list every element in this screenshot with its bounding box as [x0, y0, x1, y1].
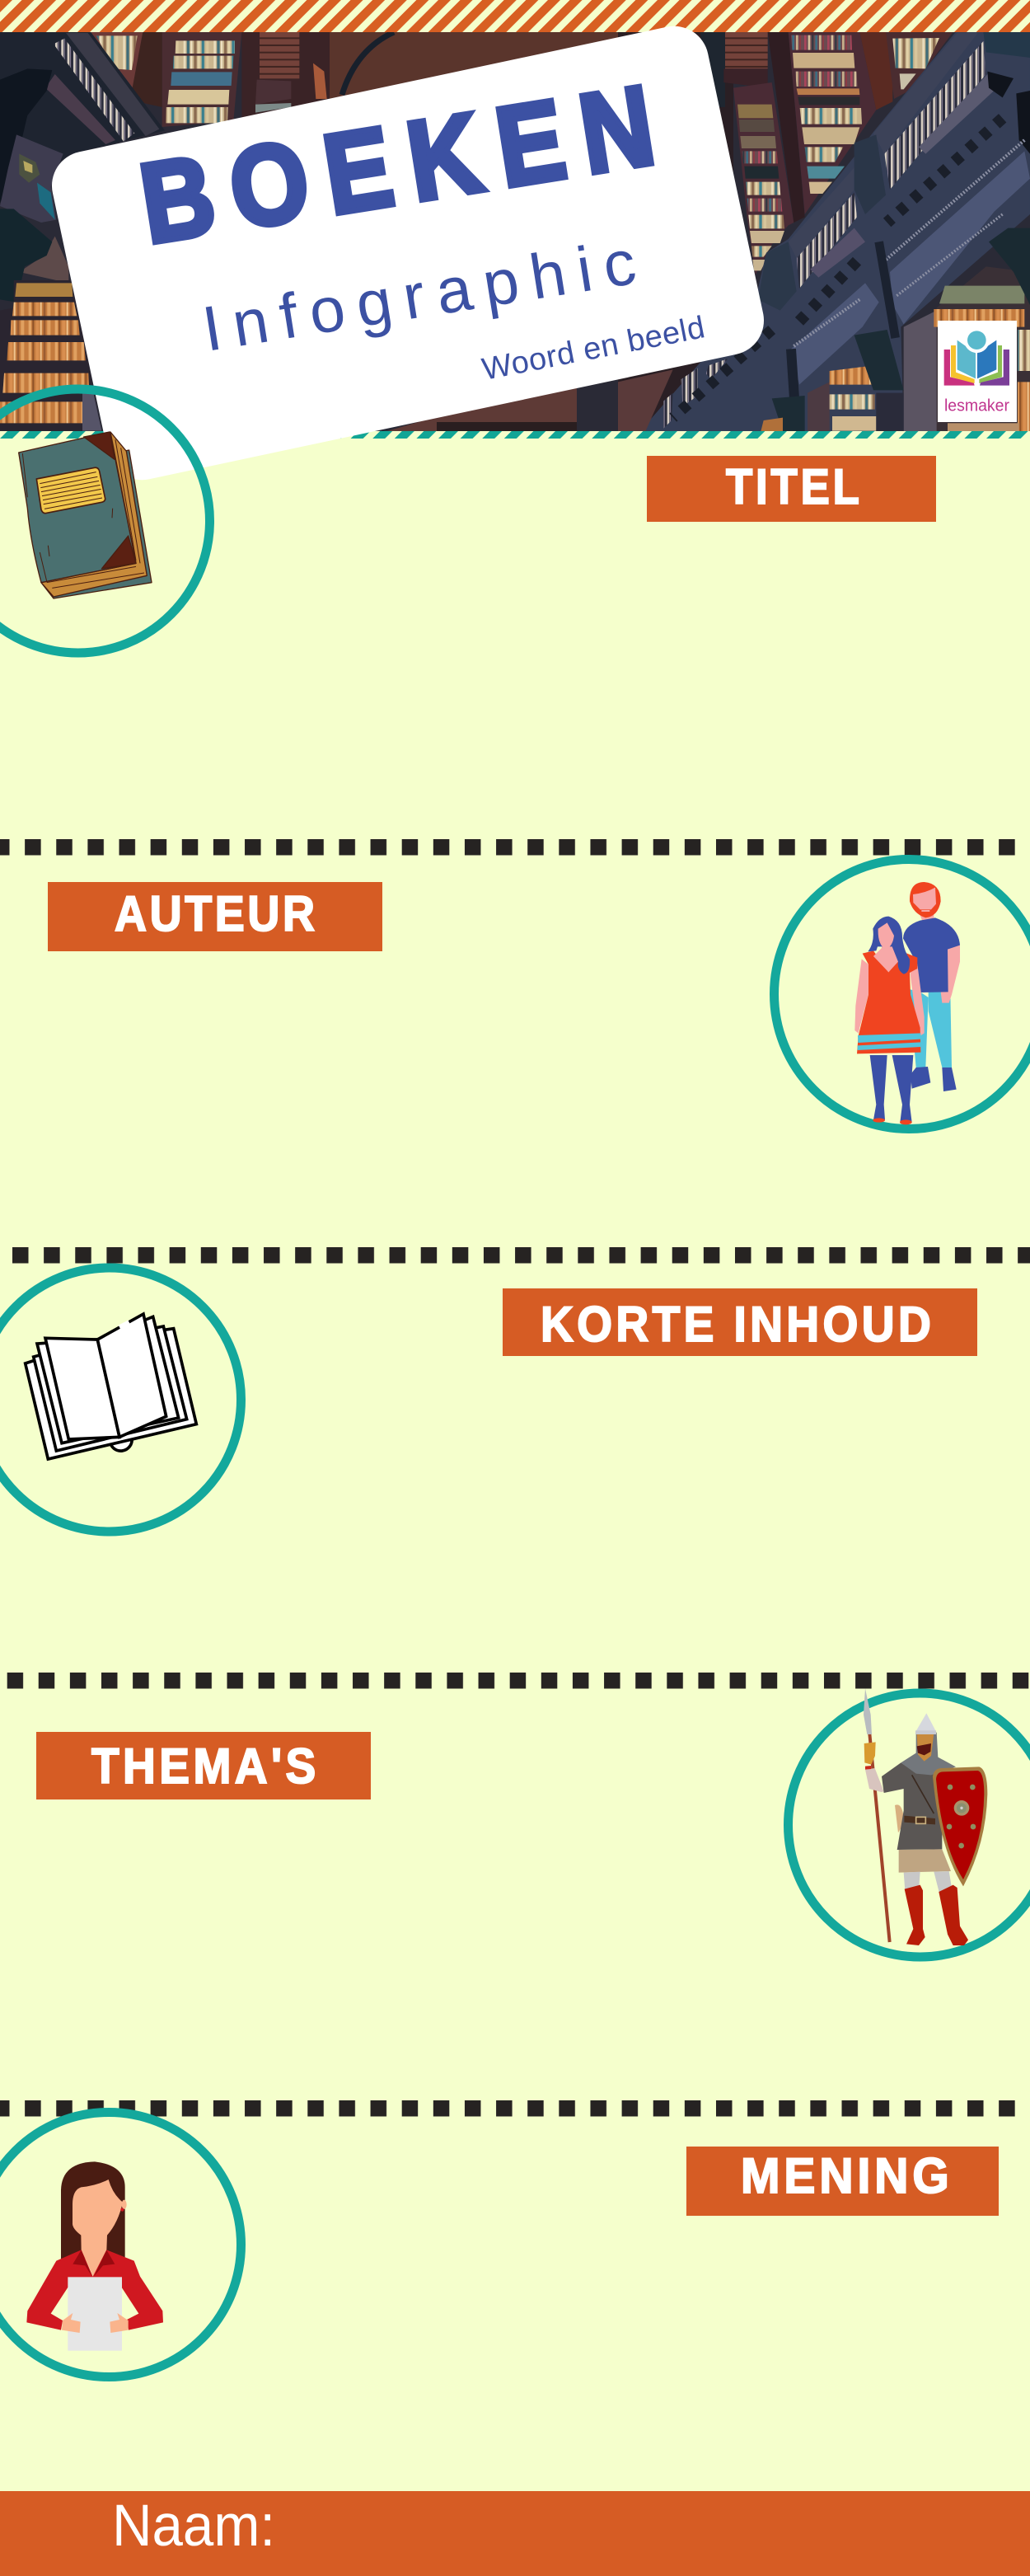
label: AUTEUR: [48, 882, 382, 951]
label: TITEL: [647, 456, 936, 522]
circle: mening: [0, 2112, 241, 2377]
teal striped border under photo: [0, 431, 1030, 439]
icon: soldier: [864, 1688, 987, 1945]
divider row 1: [0, 839, 1030, 856]
icon: open book: [26, 1314, 196, 1459]
header photo: library: [0, 32, 1030, 433]
divider row 3: [7, 1673, 1030, 1688]
circle: titel: [0, 389, 209, 653]
title card: [45, 20, 770, 486]
icon: couple: [854, 882, 960, 1124]
subtitle: Woord en beeld: Woord en beeld: [480, 310, 708, 387]
label: KORTE INHOUD: [503, 1288, 977, 1356]
divider row 4: [0, 2100, 1030, 2117]
label: MENING: [686, 2147, 999, 2216]
label: THEMA'S: [36, 1732, 371, 1799]
top striped border: [0, 0, 1030, 32]
circle: auteur: [775, 859, 1030, 1129]
icon: closed book: [19, 432, 152, 598]
footer bar: Naam:: [112, 2494, 275, 2559]
label: KORTE INHOUD: KORTE INHOUD: [541, 1297, 931, 1353]
title: BOEKEN: BOEKEN: [133, 62, 662, 267]
circle: thema's: [788, 1693, 1030, 1957]
footer bar: [0, 2491, 1030, 2576]
subtitle: Infographic: Infographic: [198, 227, 640, 365]
logo: lesmaker: [938, 321, 1017, 422]
label: MENING: MENING: [741, 2149, 949, 2203]
divider row 2: [12, 1247, 1030, 1263]
label: TITEL: TITEL: [726, 459, 859, 514]
logo: lesmaker: lesmaker: [944, 396, 1009, 415]
icon: woman with paper: [26, 2161, 163, 2351]
label: THEMA'S: THEMA'S: [91, 1739, 316, 1795]
label: AUTEUR: AUTEUR: [115, 886, 315, 942]
circle: korte inhoud: [0, 1268, 241, 1532]
